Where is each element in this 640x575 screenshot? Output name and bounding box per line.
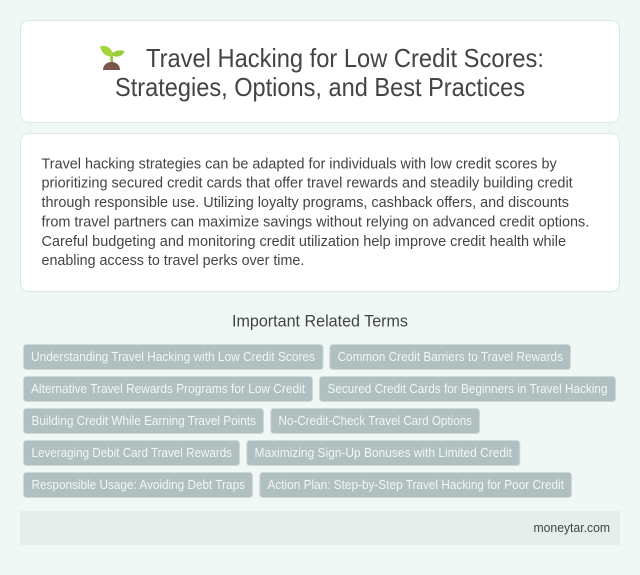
tag: action plan (260, 472, 572, 498)
description text: through responsible use. Utilizing loyalty programs, cashback offers, and discounts (42, 195, 569, 211)
footer (20, 511, 620, 545)
tag: sign-up bonuses (247, 440, 520, 466)
tag: action plan: Action Plan: Step-by-Step Travel Hacking for Poor Credit (268, 477, 564, 492)
tag: secured credit cards (320, 376, 616, 402)
tag: common credit barriers (330, 344, 570, 370)
description text: from travel partners can maximize savings without relying on advanced credit options. (42, 214, 589, 230)
heading: important related terms: Important Related Terms (232, 312, 408, 330)
tag: no-credit-check (271, 408, 480, 434)
tag: building credit (24, 408, 264, 434)
icon: seedling (100, 46, 124, 70)
tag: understanding travel hacking: Understanding Travel Hacking with Low Credit Scores (31, 349, 315, 364)
title text: Strategies, Options, and Best Practices (115, 74, 525, 102)
tag: understanding travel hacking (24, 344, 323, 370)
description text: Careful budgeting and monitoring credit utilization help improve credit health while (42, 234, 566, 250)
tag: debit card rewards: Leveraging Debit Card Travel Rewards (32, 445, 232, 460)
title text: Travel Hacking for Low Credit Scores: (146, 45, 544, 73)
tag: alternative programs (24, 376, 312, 402)
panel: title card (20, 20, 620, 122)
footer text: moneytar.com: moneytar.com (534, 520, 610, 535)
tag: debit card rewards (24, 440, 240, 466)
tag: secured credit cards: Secured Credit Cards for Beginners in Travel Hacking (328, 381, 608, 396)
tag: alternative programs: Alternative Travel Rewards Programs for Low Credit (31, 381, 305, 396)
tag: no-credit-check: No-Credit-Check Travel Card Options (278, 413, 472, 428)
description text: prioritizing secured credit cards that offer travel rewards and steadily building credit (42, 176, 573, 192)
description text: enabling access to travel perks over time. (42, 253, 304, 269)
tag: sign-up bonuses: Maximizing Sign-Up Bonuses with Limited Credit (254, 445, 512, 460)
description text: Travel hacking strategies can be adapted for individuals with low credit scores by (42, 156, 557, 172)
panel: description card (20, 134, 620, 292)
tag: building credit: Building Credit While Earning Travel Points (32, 413, 256, 428)
panel: related term tags (24, 344, 616, 498)
tag: common credit barriers: Common Credit Barriers to Travel Rewards (338, 349, 563, 364)
tag: responsible usage (24, 472, 252, 498)
tag: responsible usage: Responsible Usage: Avoiding Debt Traps (32, 477, 245, 492)
